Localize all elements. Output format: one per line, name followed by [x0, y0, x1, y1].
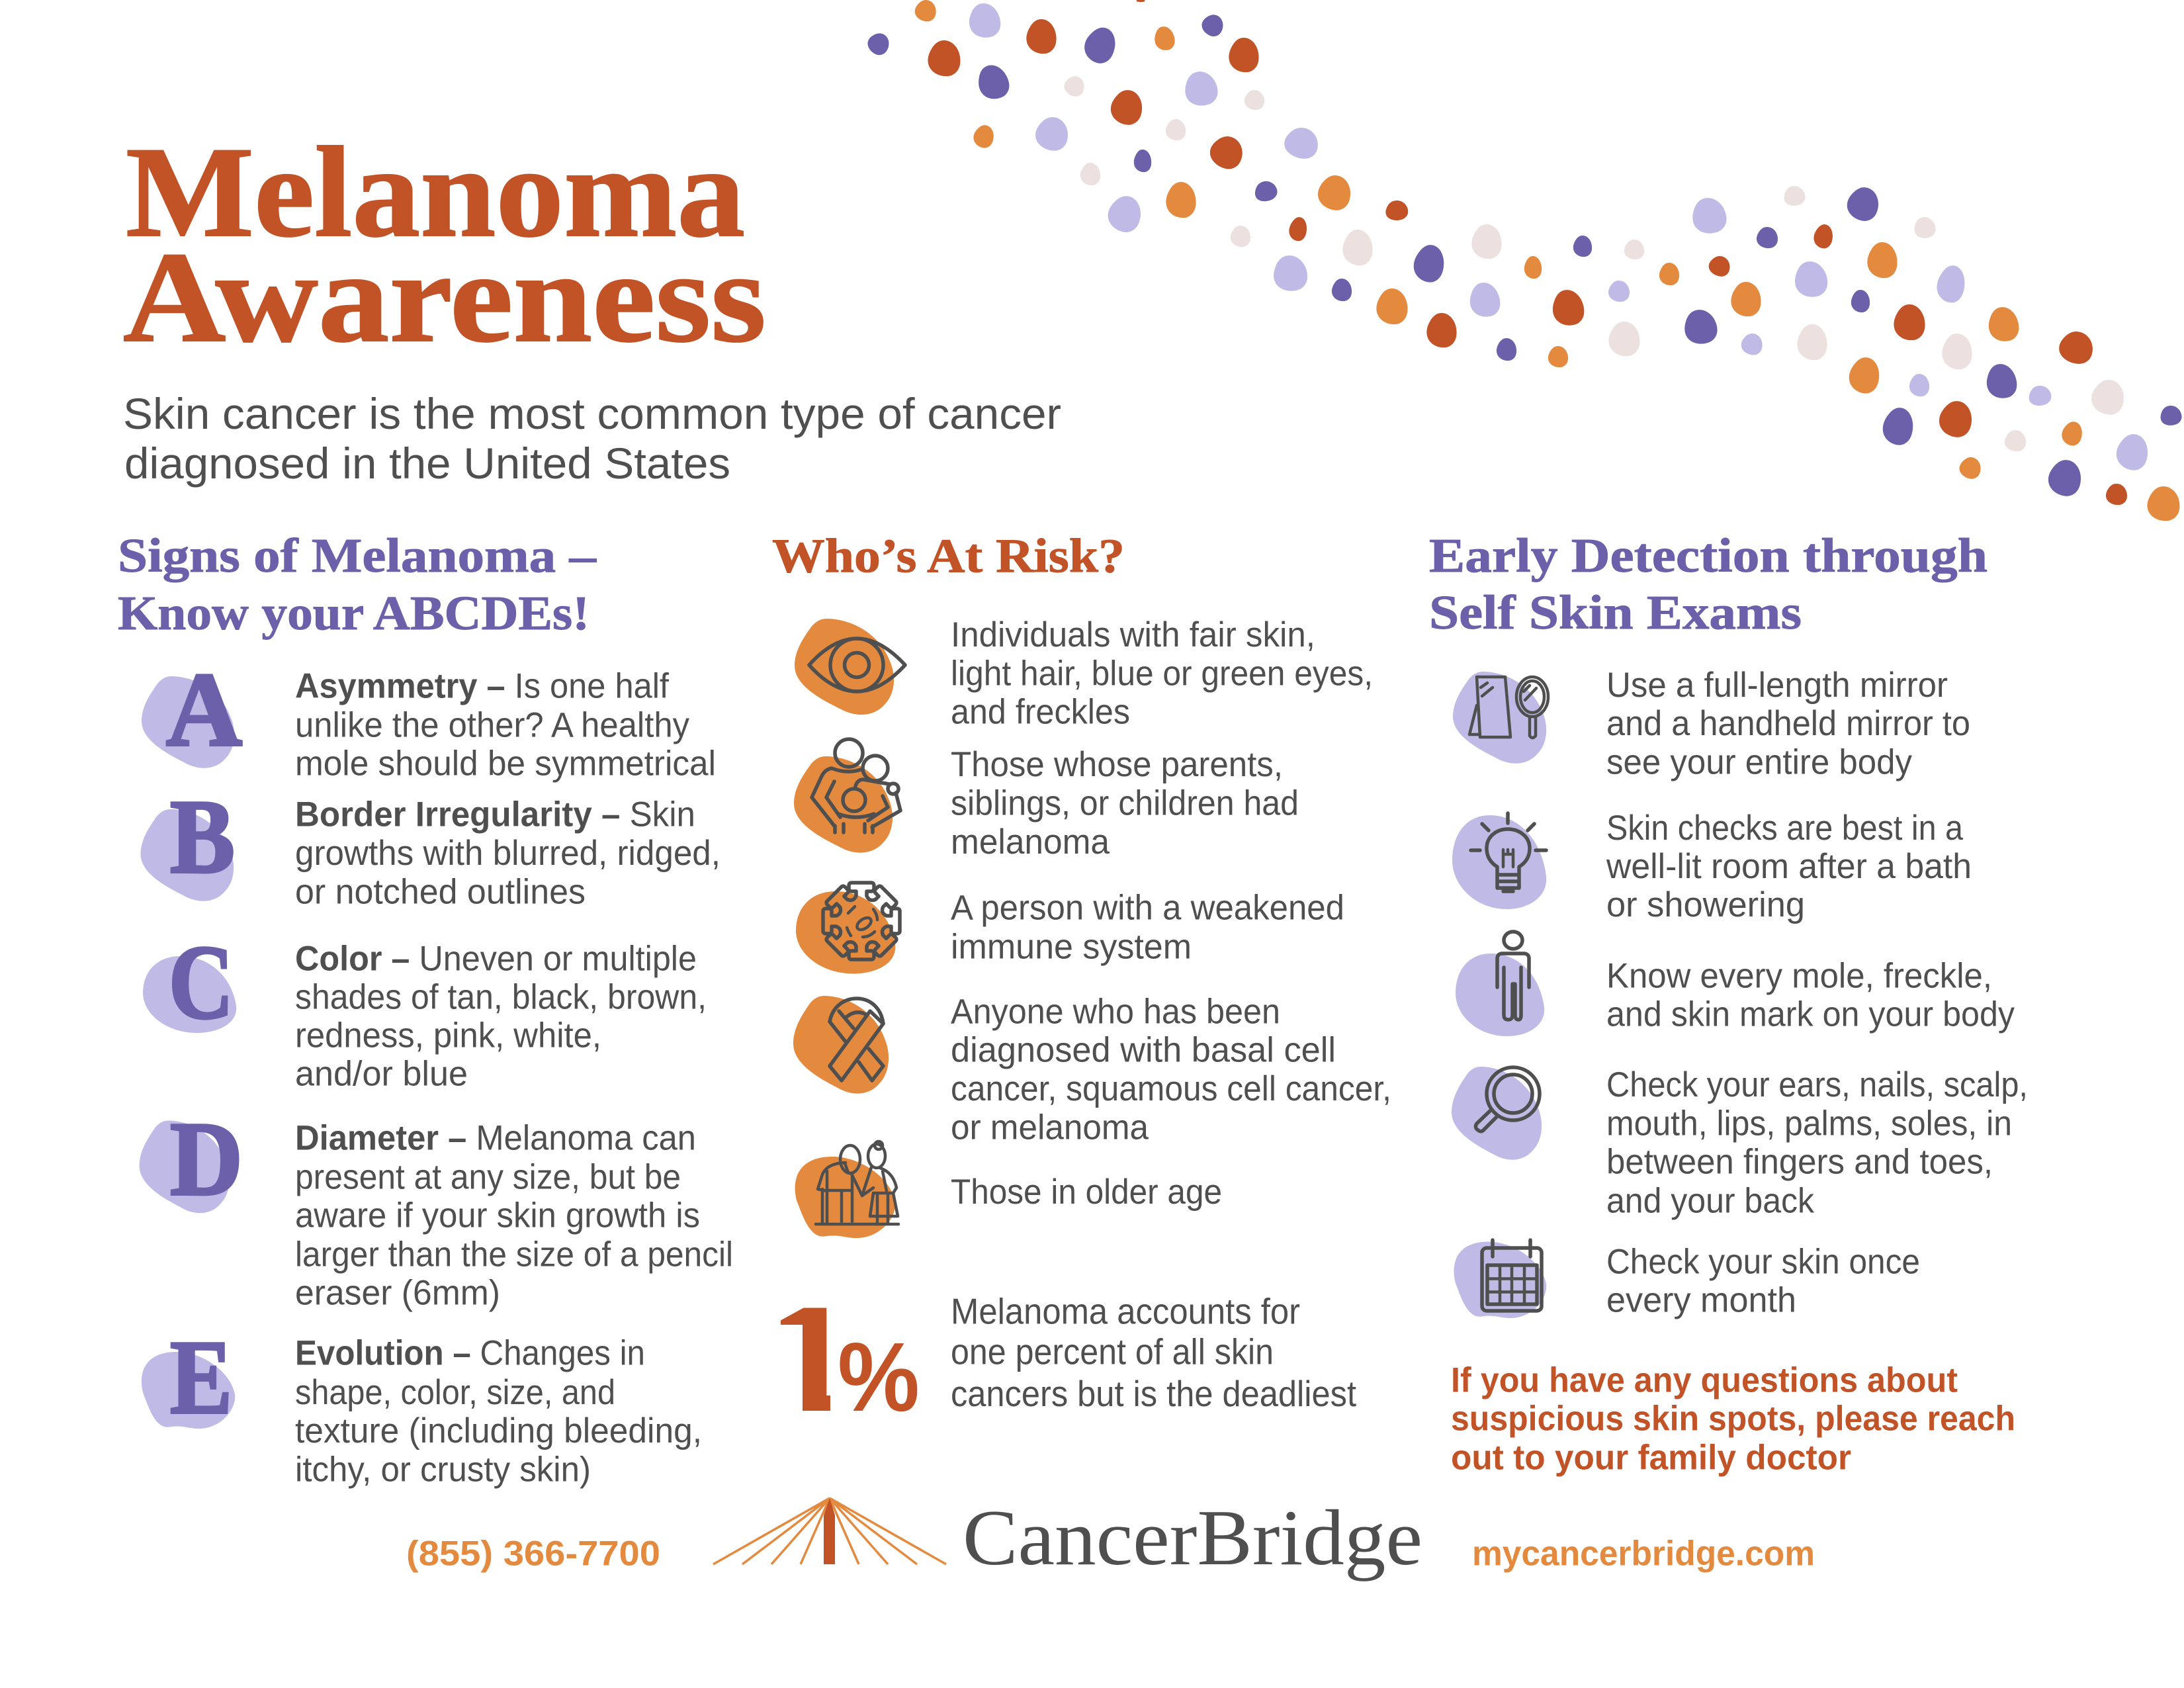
- tip: monthly, calendar icon: [1454, 1240, 1920, 1319]
- tip: check everywhere, magnifier icon: between fingers and toes,: [1606, 1142, 1993, 1182]
- risk: previous cancer, ribbon icon: Anyone who has been: [951, 993, 1280, 1031]
- title: [123, 120, 766, 369]
- tip: well-lit room, light bulb icon: well-lit room after a bath: [1606, 847, 1972, 886]
- item: B border irregularity: or notched outlines: [295, 872, 586, 912]
- item: A asymmetry: mole should be symmetrical: [295, 744, 716, 783]
- logo wordmark: CancerBridge: [963, 1493, 1422, 1581]
- risk: older age, elderly couple icon: [795, 1141, 1222, 1238]
- callout: ask your doctor: suspicious skin spots, please reach: [1451, 1399, 2015, 1439]
- subtitle: Skin cancer is the most common type of cancer: [123, 389, 1061, 438]
- item: E evolution: [142, 1318, 702, 1489]
- decorative band of coloured spots: [864, 0, 2183, 521]
- risk: previous cancer, ribbon icon: diagnosed with basal cell: [951, 1031, 1336, 1069]
- tip: know your marks, person icon: [1456, 932, 2015, 1036]
- website: mycancerbridge.com: [1472, 1534, 1815, 1574]
- tip: well-lit room, light bulb icon: [1452, 809, 1972, 924]
- item: D diameter: D: [170, 1100, 243, 1218]
- tip: check everywhere, magnifier icon: [1452, 1065, 2028, 1220]
- tip: monthly, calendar icon: Check your skin once: [1606, 1243, 1920, 1281]
- risk: weakened immune system, virus icon: A person with a weakened: [951, 888, 1344, 928]
- tip: mirrors, mirror icon: see your entire body: [1606, 742, 1912, 782]
- item: A asymmetry: [142, 650, 716, 783]
- footer: [406, 1493, 1815, 1581]
- risk: fair skin, eye icon: and freckles: [951, 692, 1130, 732]
- item: A asymmetry: unlike the other? A healthy: [295, 705, 689, 745]
- tip: mirrors, mirror icon: and a handheld mirror to: [1606, 704, 1970, 743]
- heading: early detection: Early Detection through: [1429, 529, 1987, 582]
- panel: who's at risk: [761, 529, 1391, 1443]
- callout: ask your doctor: out to your family doctor: [1451, 1439, 1851, 1477]
- heading: early detection: Self Skin Exams: [1429, 586, 1802, 639]
- tip: well-lit room, light bulb icon: or showering: [1606, 885, 1805, 924]
- risk: previous cancer, ribbon icon: cancer, squamous cell cancer,: [951, 1069, 1391, 1108]
- heading: early detection: [1429, 529, 1987, 639]
- item: B border irregularity: growths with blurred, ridged,: [295, 834, 721, 873]
- tip: check everywhere, magnifier icon: and your back: [1606, 1182, 1814, 1220]
- tip: know your marks, person icon: and skin mark on your body: [1606, 995, 2015, 1034]
- item: C color: [143, 923, 707, 1093]
- tip: monthly, calendar icon: every month: [1606, 1281, 1796, 1319]
- risk: previous cancer, ribbon icon: or melanoma: [951, 1108, 1149, 1147]
- heading: signs of melanoma: [118, 529, 597, 640]
- heading: who's at risk: Who’s At Risk?: [772, 529, 1125, 582]
- item: D diameter: present at any size, but be: [295, 1158, 681, 1196]
- item: C color: and/or blue: [295, 1055, 468, 1093]
- callout: ask your doctor: [1451, 1360, 2015, 1477]
- subtitle: diagnosed in the United States: [124, 439, 730, 488]
- statistic: one percent: 1: [761, 1275, 859, 1443]
- tip: check everywhere, magnifier icon: mouth, lips, palms, soles, in: [1606, 1104, 2012, 1143]
- item: A asymmetry: Asymmetry – Is one half: [295, 667, 669, 705]
- item: C color: Color – Uneven or multiple: [295, 940, 697, 978]
- item: C color: C: [169, 923, 234, 1041]
- heading: signs of melanoma: Signs of Melanoma –: [118, 529, 597, 582]
- tip: mirrors, mirror icon: [1453, 666, 1970, 782]
- heading: signs of melanoma: Know your ABCDEs!: [118, 586, 590, 640]
- title: Awareness: [123, 226, 766, 369]
- statistic: one percent: cancers but is the deadliest: [951, 1373, 1356, 1414]
- statistic: one percent: one percent of all skin: [951, 1331, 1274, 1372]
- statistic: one percent: Melanoma accounts for: [951, 1290, 1300, 1331]
- risk: family history, family icon: siblings, or children had: [951, 783, 1299, 823]
- item: B border irregularity: Border Irregularity – Skin: [295, 795, 695, 834]
- risk: previous cancer, ribbon icon: [793, 993, 1391, 1147]
- panel: signs of melanoma: [118, 529, 733, 1489]
- item: E evolution: itchy, or crusty skin): [295, 1450, 591, 1489]
- item: C color: shades of tan, black, brown,: [295, 978, 707, 1016]
- statistic: one percent: %: [838, 1323, 920, 1432]
- risk: weakened immune system, virus icon: [796, 883, 1344, 974]
- logo mark: bridge: [713, 1498, 946, 1564]
- item: A asymmetry: A: [166, 650, 242, 768]
- item: C color: redness, pink, white,: [295, 1016, 601, 1055]
- panel: early detection: [1429, 529, 2028, 1477]
- item: D diameter: aware if your skin growth is: [295, 1196, 700, 1235]
- risk: fair skin, eye icon: Individuals with fair skin,: [951, 615, 1315, 654]
- risk: fair skin, eye icon: [795, 615, 1373, 732]
- item: D diameter: larger than the size of a pencil: [295, 1235, 733, 1274]
- statistic: one percent: [781, 1298, 1356, 1412]
- item: E evolution: shape, color, size, and: [295, 1373, 615, 1412]
- item: D diameter: Diameter – Melanoma can: [295, 1118, 696, 1158]
- phone number: (855) 366-7700: [406, 1534, 660, 1574]
- title: Melanoma: [126, 120, 745, 264]
- risk: older age, elderly couple icon: Those in older age: [951, 1173, 1222, 1212]
- risk: family history, family icon: melanoma: [951, 822, 1110, 862]
- tip: well-lit room, light bulb icon: Skin checks are best in a: [1606, 809, 1963, 848]
- tip: know your marks, person icon: Know every mole, freckle,: [1606, 957, 1992, 995]
- item: B border irregularity: [140, 777, 721, 912]
- tip: mirrors, mirror icon: Use a full-length mirror: [1606, 666, 1948, 705]
- item: E evolution: Evolution – Changes in: [295, 1334, 645, 1372]
- item: D diameter: eraser (6mm): [295, 1273, 500, 1313]
- item: E evolution: E: [170, 1318, 232, 1436]
- tip: check everywhere, magnifier icon: Check your ears, nails, scalp,: [1606, 1065, 2028, 1104]
- risk: weakened immune system, virus icon: immune system: [951, 928, 1192, 966]
- item: B border irregularity: B: [170, 777, 235, 895]
- subtitle: [123, 389, 1061, 488]
- risk: family history, family icon: Those whose parents,: [951, 745, 1283, 784]
- callout: ask your doctor: If you have any questions about: [1451, 1360, 1958, 1400]
- risk: family history, family icon: [794, 739, 1299, 862]
- risk: fair skin, eye icon: light hair, blue or green eyes,: [951, 654, 1373, 693]
- item: E evolution: texture (including bleeding,: [295, 1411, 702, 1450]
- item: D diameter: [140, 1100, 733, 1313]
